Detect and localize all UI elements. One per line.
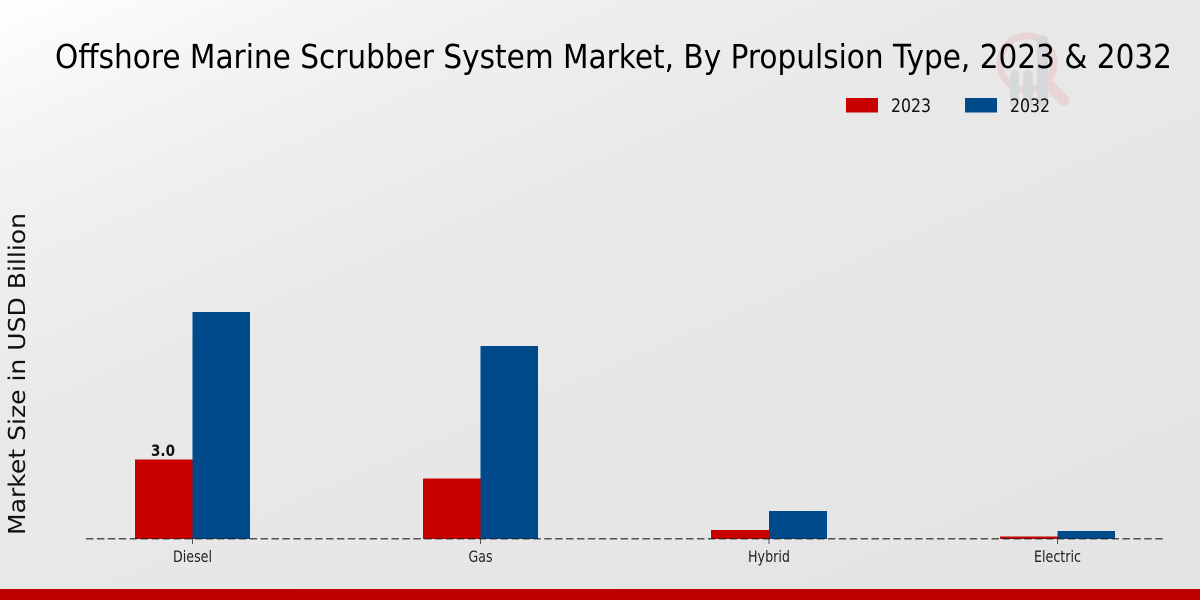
group: Hybrid	[711, 511, 827, 566]
bar chart	[86, 312, 1164, 566]
icon: watermark magnifier with bars	[1000, 35, 1064, 108]
group: Diesel	[135, 312, 250, 566]
legend item: 2023: 2023	[891, 95, 931, 117]
group: Electric: Electric	[1034, 547, 1081, 566]
footer bar	[0, 589, 1200, 600]
group: Gas	[423, 346, 538, 566]
group: Electric	[1000, 531, 1115, 566]
group: Gas: Gas	[468, 547, 492, 566]
legend item: 2032	[965, 95, 1050, 117]
group: Diesel: Diesel	[173, 547, 212, 566]
legend item: 2023	[846, 95, 931, 117]
y-axis label: Market Size in USD Billion	[3, 213, 31, 535]
group: Hybrid: Hybrid	[748, 547, 790, 566]
legend	[846, 95, 1050, 117]
legend item: 2032: 2032	[1010, 95, 1050, 117]
group: Diesel: 3.0	[151, 441, 175, 460]
